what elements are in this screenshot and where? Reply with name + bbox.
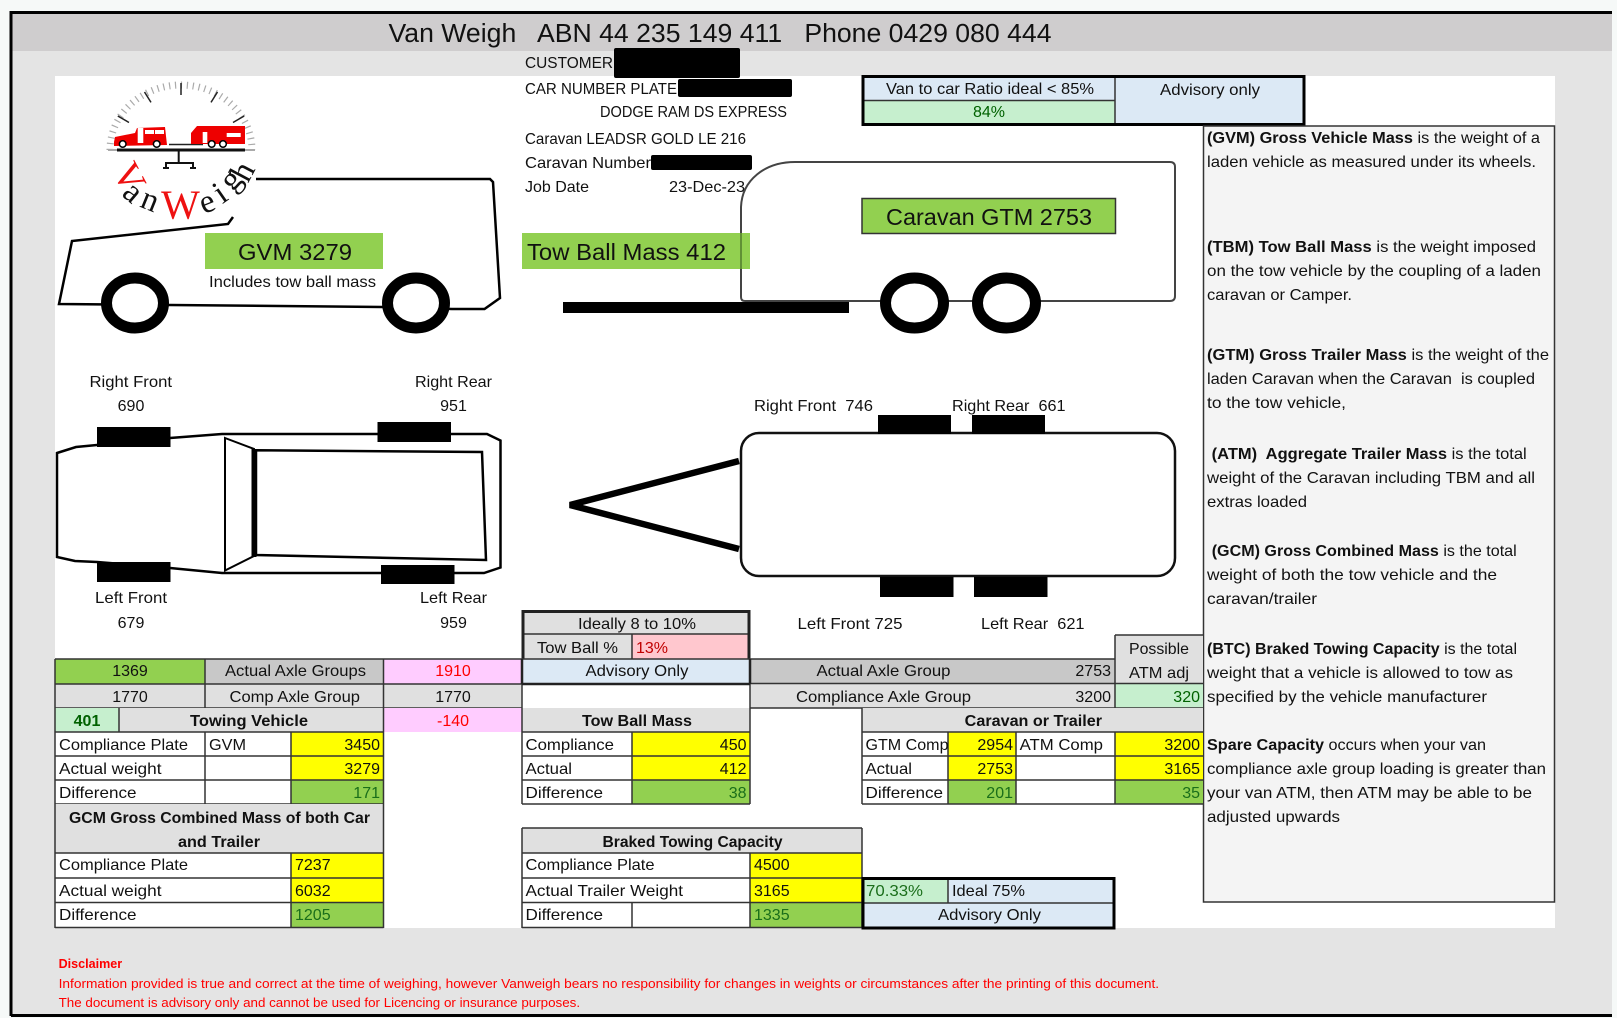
logo: VanWeigh gauge: n [136, 180, 165, 220]
logo: VanWeigh gauge: h [223, 156, 263, 187]
table: caravan or trailer: 201 [986, 785, 1013, 802]
disclaimer: Disclaimer [59, 956, 122, 971]
table: axle groups summary: 1770 [435, 689, 471, 706]
panel: definitions: weight of the Caravan including TBM and all [1206, 470, 1535, 487]
van to car ratio box: Advisory only [1160, 82, 1260, 99]
table: towing vehicle: 401 [74, 713, 100, 730]
table: towing vehicle: 3279 [344, 761, 380, 778]
table: tow ball mass: Difference [526, 785, 603, 802]
table: gross combined mass: 1205 [295, 907, 331, 924]
table: braked towing capacity [522, 828, 862, 928]
tow ball percentage box: 13% [636, 640, 668, 657]
van to car ratio box: 84% [973, 104, 1005, 121]
table: caravan or trailer: 2753 [977, 761, 1013, 778]
customer and job details: Caravan LEADSR GOLD LE 216 [525, 131, 746, 148]
panel: definitions: (GCM) Gross Combined Mass is the total [1212, 543, 1517, 560]
panel: definitions: your van ATM, then ATM may be able to be [1207, 785, 1532, 802]
panel: definitions: on the tow vehicle by the coupling of a laden [1207, 263, 1541, 280]
table: tow ball mass: Actual [526, 761, 572, 778]
table: braked towing capacity: Compliance Plate [526, 857, 655, 874]
Caravan GTM label [862, 198, 1116, 234]
caravan wheel labels: Right Front 746 [754, 398, 873, 415]
trailer ratio advisory box: Advisory Only [938, 907, 1041, 924]
table: braked towing capacity: Difference [526, 907, 603, 924]
table: tow ball mass: 450 [720, 737, 747, 754]
table: towing vehicle: Actual weight [59, 761, 162, 778]
table: braked towing capacity: 1335 [754, 907, 790, 924]
table: tow ball mass: 412 [720, 761, 747, 778]
panel: definitions: specified by the vehicle manufacturer [1207, 689, 1488, 706]
table: gross combined mass: and Trailer [178, 834, 260, 851]
table: gross combined mass [55, 804, 384, 928]
caravan wheel labels: Right Rear 661 [952, 398, 1066, 415]
table: towing vehicle: Difference [59, 785, 137, 802]
table: axle groups summary: 320 [1173, 689, 1200, 706]
table: caravan or trailer [862, 708, 1203, 804]
panel: definitions: caravan or Camper. [1207, 287, 1352, 304]
table: axle groups summary: 1910 [435, 663, 471, 680]
table: axle groups summary: ATM adj [1129, 665, 1189, 682]
van wheel labels: 951 [440, 398, 467, 415]
table: caravan or trailer: Difference [866, 785, 943, 802]
tow ball percentage box: Ideally 8 to 10% [578, 616, 696, 633]
table: axle groups summary: Possible [1129, 641, 1189, 658]
table: braked towing capacity: Braked Towing Capacity [602, 834, 783, 851]
customer and job details: Job Date [525, 179, 589, 196]
table: gross combined mass: Compliance Plate [59, 857, 188, 874]
table: axle groups summary: Compliance Axle Group [796, 689, 971, 706]
table: gross combined mass: Difference [59, 907, 137, 924]
logo: VanWeigh gauge: W [161, 182, 200, 228]
panel: definitions: (TBM) Tow Ball Mass is the weight imposed [1207, 239, 1536, 256]
table: tow ball mass: Compliance [526, 737, 614, 754]
table: gross combined mass: GCM Gross Combined Mass of both Car [69, 810, 370, 827]
table: braked towing capacity: 3165 [754, 883, 790, 900]
table: towing vehicle: -140 [437, 713, 469, 730]
table: caravan or trailer: 3200 [1164, 737, 1200, 754]
panel: definitions: (ATM) Aggregate Trailer Mass is the total [1212, 446, 1527, 463]
table: braked towing capacity: 4500 [754, 857, 790, 874]
logo: VanWeigh gauge: V [104, 156, 154, 200]
GVM label [205, 233, 383, 269]
table: caravan or trailer: GTM Comp [866, 737, 949, 754]
van wheel labels: Right Front [90, 374, 173, 391]
panel: definitions: adjusted upwards [1207, 809, 1340, 826]
caravan wheel labels [754, 398, 1085, 633]
table: caravan or trailer: 3165 [1164, 761, 1200, 778]
table: caravan or trailer: 2954 [977, 737, 1013, 754]
van wheel labels [90, 374, 493, 632]
table: caravan or trailer: Caravan or Trailer [965, 713, 1102, 730]
panel: definitions: Spare Capacity occurs when your van [1207, 737, 1486, 754]
table: caravan or trailer: ATM Comp [1020, 737, 1103, 754]
panel: definitions: extras loaded [1207, 494, 1307, 511]
caravan wheel labels: Left Front 725 [798, 616, 903, 633]
Tow Ball Mass label: Tow Ball Mass 412 [527, 239, 726, 265]
logo: VanWeigh gauge [104, 83, 263, 228]
table: axle groups summary [55, 635, 1203, 708]
van to car ratio box [863, 76, 1304, 125]
table: towing vehicle: 171 [353, 785, 380, 802]
table: caravan or trailer: Actual [866, 761, 912, 778]
caravan wheel labels: Left Rear 621 [981, 616, 1085, 633]
icon: van side view [59, 179, 500, 328]
trailer ratio advisory box: Ideal 75% [952, 883, 1025, 900]
table: tow ball mass [522, 708, 750, 804]
customer and job details: Caravan Number [525, 155, 652, 172]
panel: definitions: laden Caravan when the Caravan is coupled [1207, 371, 1535, 388]
icon: caravan side view [563, 162, 1175, 328]
table: axle groups summary: 3200 [1075, 689, 1111, 706]
table: towing vehicle: GVM [209, 737, 246, 754]
panel: definitions: weight of both the tow vehicle and the [1206, 567, 1497, 584]
trailer ratio advisory box [862, 878, 1115, 928]
van wheel labels: Left Front [95, 590, 168, 607]
trailer ratio advisory box: 70.33% [866, 883, 923, 900]
tow ball percentage box: Tow Ball % [537, 640, 618, 657]
table: axle groups summary: Comp Axle Group [230, 689, 360, 706]
van wheel labels: Left Rear [420, 590, 488, 607]
panel: definitions: to the tow vehicle, [1207, 395, 1346, 412]
GVM label: GVM 3279 [238, 239, 352, 265]
logo: VanWeigh gauge: i [206, 176, 234, 211]
logo: VanWeigh gauge: a [116, 174, 150, 211]
table: tow ball mass: 38 [729, 785, 747, 802]
panel: definitions [1204, 126, 1554, 902]
panel: definitions: weight that a vehicle is allowed to tow as [1206, 665, 1513, 682]
Caravan GTM label: Caravan GTM 2753 [886, 204, 1092, 230]
panel: definitions: (GTM) Gross Trailer Mass is the weight of the [1207, 347, 1549, 364]
GVM note: Includes tow ball mass [209, 274, 376, 291]
table: gross combined mass: Actual weight [59, 883, 162, 900]
table: towing vehicle [55, 708, 522, 804]
panel: definitions: (BTC) Braked Towing Capacity is the total [1207, 641, 1517, 658]
van wheel labels: 959 [440, 615, 467, 632]
customer and job details [525, 48, 792, 196]
table: towing vehicle: Compliance Plate [59, 737, 188, 754]
Tow Ball Mass label [522, 233, 750, 269]
table: caravan or trailer: 35 [1182, 785, 1200, 802]
table: axle groups summary: 2753 [1075, 663, 1111, 680]
table: braked towing capacity: Actual Trailer Weight [526, 883, 684, 900]
panel: definitions: compliance axle group loading is greater than [1207, 761, 1546, 778]
disclaimer [59, 956, 1159, 1010]
table: axle groups summary: Advisory Only [586, 663, 688, 680]
icon: caravan top view [570, 415, 1175, 597]
table: towing vehicle: 3450 [344, 737, 380, 754]
customer and job details: 23-Dec-23 [669, 179, 745, 196]
disclaimer: Information provided is true and correct at the time of weighing, however Vanweigh bears no responsibility for changes in weights or circumstances after the printing of this document. [59, 976, 1159, 991]
van wheel labels: Right Rear [415, 374, 493, 391]
icon: van top view [57, 422, 500, 584]
van wheel labels: 679 [118, 615, 144, 632]
customer and job details: CUSTOMER [525, 55, 613, 72]
customer and job details: DODGE RAM DS EXPRESS [600, 104, 787, 121]
table: axle groups summary: 1770 [112, 689, 148, 706]
table: gross combined mass: 6032 [295, 883, 331, 900]
logo: VanWeigh gauge: e [193, 183, 220, 222]
tow ball percentage box [523, 611, 749, 659]
van wheel labels: 690 [118, 398, 144, 415]
table: tow ball mass: Tow Ball Mass [582, 713, 692, 730]
panel: definitions: laden vehicle as measured under its wheels. [1207, 154, 1536, 171]
table: axle groups summary: 1369 [112, 663, 148, 680]
customer and job details: CAR NUMBER PLATE [525, 81, 677, 98]
van to car ratio box: Van to car Ratio ideal < 85% [886, 81, 1094, 98]
table: axle groups summary: Actual Axle Groups [225, 663, 366, 680]
table: axle groups summary: Actual Axle Group [816, 663, 951, 680]
table: gross combined mass: 7237 [295, 857, 331, 874]
panel: definitions: caravan/trailer [1207, 591, 1318, 608]
logo: VanWeigh gauge: g [212, 161, 250, 198]
panel: definitions: (GVM) Gross Vehicle Mass is the weight of a [1207, 130, 1540, 147]
table: towing vehicle: Towing Vehicle [190, 713, 308, 730]
title: Van Weigh ABN 44 235 149 411 Phone 0429 080 444 [388, 20, 1052, 48]
disclaimer: The document is advisory only and cannot be used for Licencing or insurance purposes. [59, 995, 580, 1010]
